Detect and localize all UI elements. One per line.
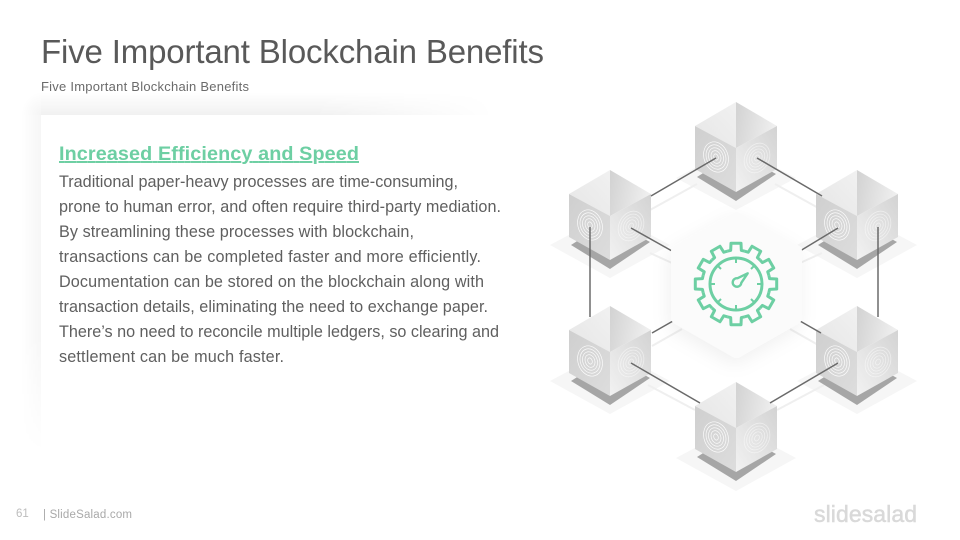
heading: Increased Efficiency and Speed [59, 143, 359, 165]
body text [59, 173, 501, 366]
icon: gear with speedometer [695, 243, 777, 325]
cube: lower left [569, 306, 651, 405]
panel shadow: corner [21, 92, 41, 115]
cube: bottom [695, 382, 777, 481]
body text: prone to human error, and often require third-party mediation. [59, 198, 501, 216]
body text: By streamlining these processes with blockchain, [59, 223, 414, 241]
logo: slidesalad: slidesalad [814, 501, 917, 527]
body text: transactions can be completed faster and more efficiently. [59, 248, 481, 266]
subtitle: Five Important Blockchain Benefits [41, 79, 250, 94]
base plates [550, 146, 917, 491]
footer source: | SlideSalad.com [43, 509, 132, 521]
cube: top [695, 102, 777, 201]
body text: transaction details, eliminating the need to exchange paper. [59, 298, 488, 316]
body text: Traditional paper-heavy processes are time-consuming, [59, 173, 458, 191]
center hexagon [677, 218, 796, 352]
panel shadow: left [40, 115, 41, 342]
body text: There’s no need to reconcile multiple ledgers, so clearing and [59, 323, 499, 341]
page number: 61 [16, 508, 29, 520]
cube: upper left [569, 170, 651, 269]
light connector lines [648, 184, 824, 410]
diagram: blockchain network [550, 102, 917, 491]
cube: upper right [816, 170, 898, 269]
panel shadow: top [41, 106, 385, 115]
title: Five Important Blockchain Benefits [41, 33, 544, 70]
dark connector lines [590, 158, 878, 403]
cube: lower right [816, 306, 898, 405]
body text: Documentation can be stored on the blockchain along with [59, 273, 484, 291]
body text: settlement can be much faster. [59, 348, 284, 366]
